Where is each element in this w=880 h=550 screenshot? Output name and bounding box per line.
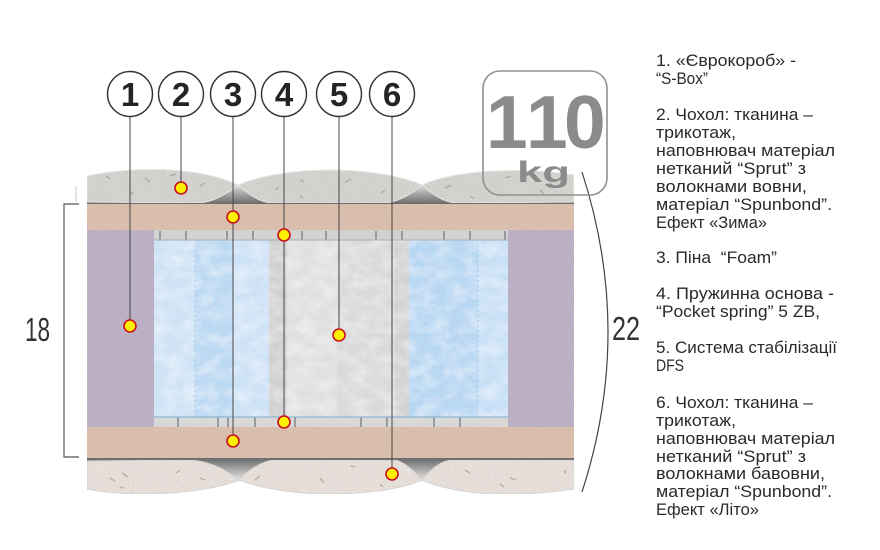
top quilted cover [87,169,574,203]
weight badge 110 kg [483,71,607,195]
top cover specks [106,174,544,199]
right box side [508,230,574,428]
bottom cover specks [110,466,565,488]
legend text: трикотаж, [656,411,736,430]
legend text: 2. Чохол: тканина – [656,105,814,124]
spring wire marks [154,231,508,427]
callout 1: 1 [121,76,139,113]
total height arc 22 [582,172,640,492]
legend text: 1. «Єврокороб» - [656,51,796,70]
legend text: 6. Чохол: тканина – [656,393,814,412]
legend text: “Pocket spring” 5 ZB, [656,302,820,321]
centre white pocket springs [269,240,409,417]
bottom quilted cover [87,460,574,494]
legend text: Ефект «Зима» [656,213,767,232]
top spring strip [154,230,508,241]
legend text: Ефект «Літо» [656,500,759,519]
top foam layer [87,204,574,230]
legend text: волокнами вовни, [656,177,807,196]
callout 4: 4 [275,76,294,113]
bottom spring strip [154,417,508,428]
callout 2 [158,72,204,194]
bottom foam layer [87,427,574,458]
height label 22: 22 [612,310,640,347]
callout 3: 3 [224,76,242,113]
height bracket 18 [25,186,79,457]
weight badge 110 kg: 110 [486,80,606,164]
legend text: нетканий “Sprut” з [656,159,806,178]
weight badge 110 kg: kg [517,156,570,189]
legend text: DFS [656,356,684,375]
left blue pocket springs [154,240,269,417]
callout 5 [316,72,362,341]
legend text: волокнами бавовни, [656,464,825,483]
legend text: нетканий “Sprut” з [656,447,806,466]
callout 4 [262,72,306,428]
legend text: матеріал “Spunbond”. [656,482,832,501]
callout 5: 5 [330,76,348,113]
callout 6: 6 [383,76,401,113]
bottom quilt valley shadow [87,458,574,481]
legend text: трикотаж, [656,123,736,142]
callout 2: 2 [172,76,190,113]
legend text: 3. Піна “Foam” [656,248,777,267]
legend text: 4. Пружинна основа - [656,284,834,303]
callout 3 [210,72,256,447]
callout 6 [370,72,414,480]
legend text: наповнювач матеріал [656,429,835,448]
top quilt valley shadow [87,185,574,204]
legend text [656,51,837,519]
legend text: матеріал “Spunbond”. [656,195,832,214]
left box side [87,230,154,428]
legend text: 5. Система стабілізації [656,338,837,357]
spring unit [154,230,508,428]
legend text: “S-Box” [656,69,708,88]
mattress cross-section [87,169,574,494]
callout 1 [108,72,152,332]
right blue pocket springs [409,240,508,417]
height label 18: 18 [25,311,50,348]
legend text: наповнювач матеріал [656,141,835,160]
